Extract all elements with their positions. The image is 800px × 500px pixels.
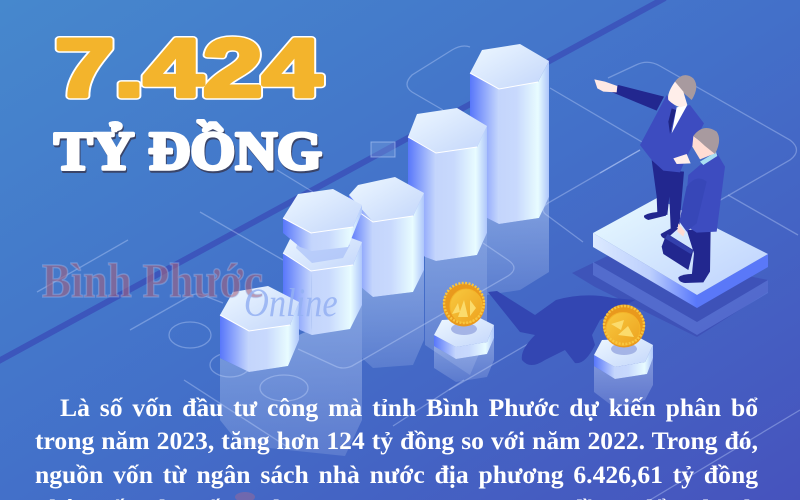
watermark (42, 255, 338, 326)
body text: Là số vốn đầu tư công mà tỉnh Bình Phước dự kiến phân bổ (60, 393, 758, 422)
column 2 lower (283, 230, 362, 335)
watermark: Online (244, 282, 338, 326)
platform shadow (572, 250, 768, 337)
unit: TỶ ĐỒNG: TỶ ĐỒNG (54, 122, 322, 182)
rectangle marker (371, 142, 395, 157)
watermark: Bình Phước (42, 255, 263, 309)
unit: TỶ ĐỒNG: TỶ ĐỒNG (55, 124, 323, 184)
column 4 (408, 108, 487, 261)
coin pedestal right (594, 338, 653, 379)
column 3 (349, 177, 424, 297)
figure: 7.424: 7.424 (55, 23, 322, 114)
coin left (438, 279, 490, 331)
body text: nguồn vốn từ ngân sách nhà nước địa phương 6.426,61 tỷ đồng (35, 460, 758, 489)
body text: trong năm 2023, tăng hơn 124 tỷ đồng so với năm 2022. Trong đó, (35, 426, 758, 455)
column 1 (220, 286, 299, 372)
column reflections (220, 197, 653, 456)
diagonal band (0, 0, 665, 363)
man pointing (594, 75, 704, 239)
two businessmen (594, 75, 725, 283)
coin pedestal left (434, 318, 494, 359)
platform (593, 198, 768, 308)
man with briefcase (662, 128, 725, 283)
body text (35, 393, 758, 500)
figure: 7.424: 7.424 (55, 23, 322, 114)
small watermark at bottom (235, 492, 255, 500)
column 2 floating cap (283, 189, 362, 251)
people shadow (488, 291, 635, 365)
coin right (603, 304, 645, 348)
column 5 (470, 44, 549, 224)
